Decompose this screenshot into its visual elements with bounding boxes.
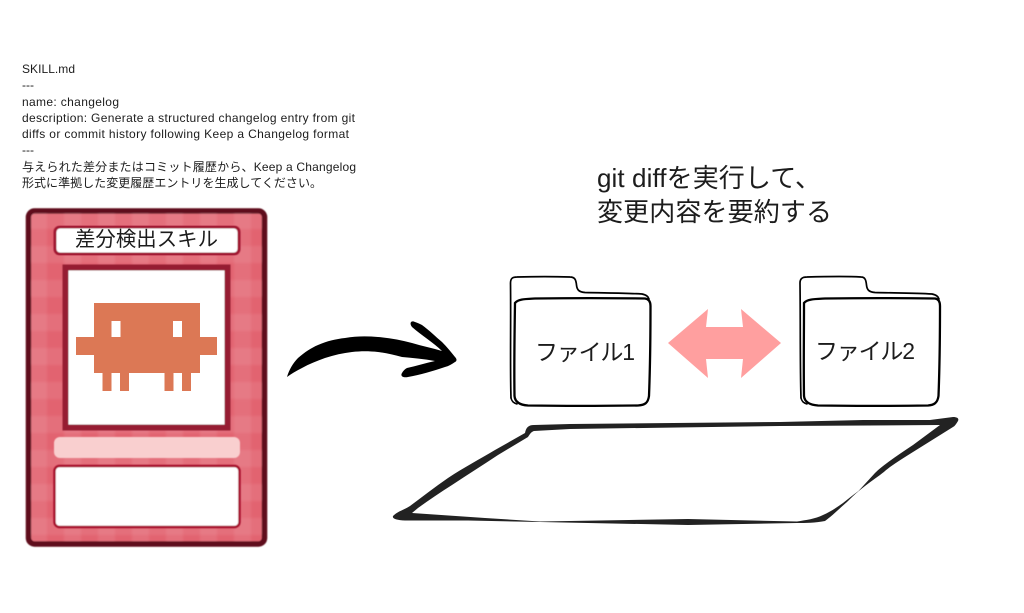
folder 2: [800, 276, 940, 406]
text block: SKILL.md contents: [22, 62, 356, 190]
folder 1: [510, 277, 650, 406]
arrow: pink double-headed arrow: [668, 309, 781, 378]
text block: SKILL.md contents: 形式に準拠した変更履歴エントリを生成してください。: [22, 175, 322, 190]
folder 1 outline: [510, 277, 650, 406]
text block: SKILL.md contents: ---: [22, 143, 34, 157]
folder 1 label: ファイル1: [535, 339, 635, 365]
text block: SKILL.md contents: SKILL.md: [22, 62, 75, 76]
text block: SKILL.md contents: description: Generate a structured changelog entry from git: [22, 111, 356, 125]
card image frame: [66, 268, 228, 428]
folder 2 label: ファイル2: [815, 338, 915, 364]
icon: pixel monster: [76, 303, 217, 391]
card title box: 差分検出スキル: [75, 228, 218, 251]
card title box: [55, 227, 239, 254]
text block: SKILL.md contents: name: changelog: [22, 95, 119, 109]
arrow: hand-drawn curved black arrow: [287, 321, 456, 377]
card plaid pattern: [30, 212, 263, 542]
heading: git diff summary: 変更内容を要約する: [597, 197, 832, 227]
shape: hand-drawn parallelogram: [393, 417, 958, 525]
panel: skill card: [28, 211, 264, 544]
card description box: [54, 466, 240, 527]
text block: SKILL.md contents: ---: [22, 78, 34, 92]
folder 2 outline: [800, 276, 940, 406]
text block: SKILL.md contents: 与えられた差分またはコミット履歴から、Keep a Changelog: [22, 160, 356, 174]
card frame: [28, 211, 264, 544]
text block: SKILL.md contents: diffs or commit history following Keep a Changelog format: [22, 127, 350, 141]
heading: git diff summary: git diffを実行して、: [597, 163, 821, 193]
card pale name bar: [54, 437, 240, 458]
heading: git diff summary: [597, 163, 832, 227]
